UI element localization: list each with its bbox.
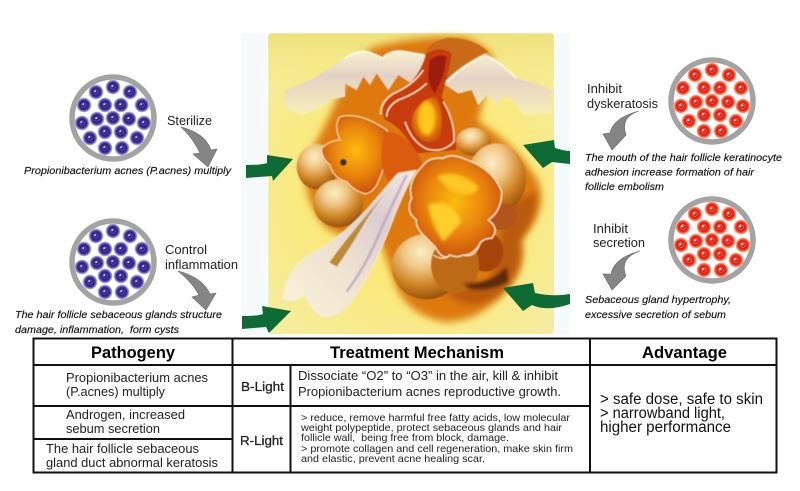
pathogeny: P. acnes: Propionibacterium acnes <box>66 370 208 385</box>
caption: sebaceous gland hypertrophy <box>585 294 731 321</box>
label: Inhibit dyskeratosis <box>587 81 658 111</box>
pathogeny: P. acnes: (P.acnes) multiply <box>66 384 165 399</box>
caption: keratinocyte adhesion: adhesion increase formation of hair <box>585 166 755 178</box>
pathogeny: androgen: sebum secretion <box>66 421 160 436</box>
sebaceous lobes upper left <box>297 144 338 189</box>
caption: keratinocyte adhesion: follicle embolism <box>585 181 664 193</box>
R-Light mechanism: > promote collagen and cell regeneration, make skin firm <box>301 443 573 455</box>
label: R-Light: R-Light <box>240 433 283 448</box>
table: pathogeny, treatment mechanism, advantage <box>33 338 777 473</box>
arrow: Inhibit dyskeratosis <box>603 111 639 150</box>
header: Treatment Mechanism: Treatment Mechanism <box>330 343 504 362</box>
green arrow: upper right <box>523 140 570 168</box>
B-Light mechanism <box>298 368 561 399</box>
hair shaft and lower follicle sheath <box>283 170 416 316</box>
B-Light mechanism: Dissociate “O2” to “O3” in the air, kill & inhibit <box>298 368 558 383</box>
bacteria circle: P. acnes multiply <box>72 77 154 159</box>
advantage list: > safe dose, safe to skin <box>600 391 763 408</box>
label: Inhibit secretion: secretion <box>593 235 645 250</box>
R-Light mechanism: > reduce, remove harmful free fatty acids, low molecular <box>301 412 571 424</box>
top follicle mass <box>425 38 488 85</box>
pathogeny: androgen: Androgen, increased <box>66 407 185 422</box>
R-Light mechanism <box>300 412 573 465</box>
pathogeny: keratosis: gland duct abnormal keratosis <box>46 455 218 470</box>
label: Inhibit dyskeratosis: dyskeratosis <box>587 96 658 111</box>
advantage list: higher performance <box>600 419 731 436</box>
caption: keratinocyte adhesion: The mouth of the hair follicle keratinocyte <box>585 152 782 164</box>
sebaceous lobes right <box>456 128 491 156</box>
header: Pathogeny: Pathogeny <box>91 343 176 362</box>
cell circle: sebaceous hypertrophy <box>671 199 753 281</box>
caption: sebaceous gland hypertrophy: excessive secretion of sebum <box>585 309 726 321</box>
label: Inhibit secretion <box>593 221 645 250</box>
cell circle: keratinocyte adhesion <box>671 60 753 142</box>
header: Advantage: Advantage <box>642 343 727 362</box>
label: B-Light: B-Light <box>241 379 284 394</box>
pathogeny: P. acnes <box>66 370 208 399</box>
caption: sebaceous glands damage <box>15 309 222 336</box>
R-Light mechanism: and elastic, prevent acne healing scar. <box>301 453 485 465</box>
skin surface right <box>443 54 552 115</box>
pore and follicle canal <box>383 49 457 153</box>
R-Light mechanism: weight polypeptide, protect sebaceous glands and hair <box>300 422 563 434</box>
advantage list: > narrowband light, <box>600 405 725 422</box>
arrow: Control inflammation <box>178 271 216 310</box>
caption: sebaceous gland hypertrophy: Sebaceous gland hypertrophy, <box>585 294 731 306</box>
green arrow: lower right <box>503 283 570 311</box>
R-Light mechanism: follicle wall, being free from block, damage. <box>301 432 509 444</box>
label: Inhibit dyskeratosis: Inhibit <box>587 81 622 96</box>
arrow: Sterilize <box>181 127 217 167</box>
skin surface left <box>285 51 426 115</box>
label: Inhibit secretion: Inhibit <box>593 221 628 236</box>
caption: sebaceous glands damage: damage, inflammation, form cysts <box>15 324 180 336</box>
central illustration: hair follicle with acne lesion <box>242 33 570 335</box>
green arrow: upper left <box>246 155 293 181</box>
label: Control inflammation: Control <box>165 242 207 257</box>
label: Sterilize: Sterilize <box>167 113 212 128</box>
orange inflammation halo <box>305 37 541 322</box>
caption: keratinocyte adhesion <box>585 152 782 193</box>
pathogeny: keratosis: The hair follicle sebaceous <box>46 441 199 456</box>
arrow: Inhibit secretion <box>603 251 640 290</box>
glandular duct lower right <box>409 156 502 257</box>
advantage list <box>600 391 763 436</box>
pathogeny: keratosis <box>46 441 218 470</box>
label: Control inflammation: inflammation <box>165 257 238 272</box>
B-Light mechanism: Propionibacterium acnes reproductive growth. <box>298 384 561 399</box>
caption: sebaceous glands damage: The hair follicle sebaceous glands structure <box>15 309 222 321</box>
bacteria circle: sebaceous gland damage <box>72 221 154 303</box>
green arrow: lower left <box>242 306 291 333</box>
caption: P. acnes multiply: Propionibacterium acnes (P.acnes) multiply <box>24 165 232 177</box>
pathogeny: androgen <box>66 407 185 436</box>
label: Control inflammation <box>165 242 238 272</box>
